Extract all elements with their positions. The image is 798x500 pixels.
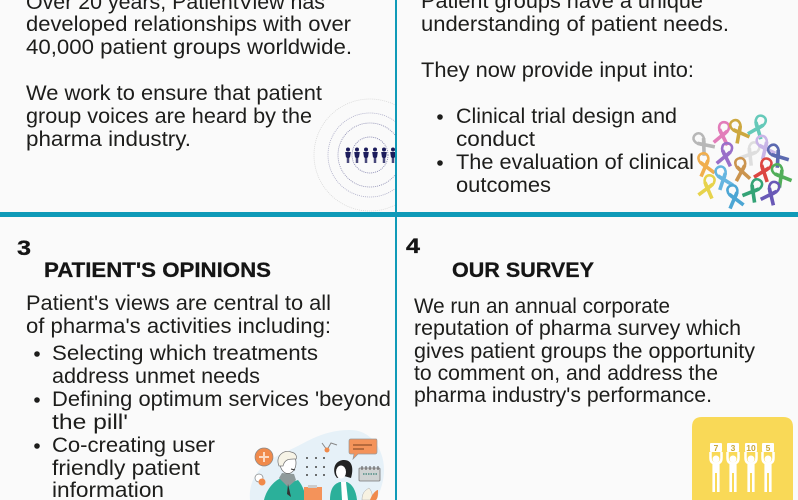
panel 1 body text: developed relationships with over <box>26 12 351 36</box>
panel 4 body text <box>414 294 755 407</box>
panel 3 bullet list: friendly patient <box>52 456 200 480</box>
panel 2 bullet list <box>437 104 694 197</box>
panel 4 body text: reputation of pharma survey which <box>414 316 741 340</box>
panel 4: our survey <box>406 234 793 500</box>
icon: yellow tile with people holding score cards: 5 <box>766 443 771 453</box>
panel 1 body text: We work to ensure that patient <box>26 81 322 105</box>
panel 3 bullet list: Co-creating user <box>52 433 215 457</box>
panel 4 body text: to comment on, and address the <box>414 361 718 385</box>
number 3: 3 <box>17 236 31 260</box>
panel 1: relationships <box>26 0 426 211</box>
panel 2 bullet list: The evaluation of clinical <box>456 150 694 174</box>
panel 3 bullet list <box>34 341 391 500</box>
illustration: doctor and patient <box>250 430 384 500</box>
panel 2 bullet list: outcomes <box>456 173 551 197</box>
panel 4 body text: gives patient groups the opportunity <box>414 339 755 363</box>
panel 3 bullet list: Selecting which treatments <box>52 341 318 365</box>
icon: yellow tile with people holding score cards: 3 <box>731 443 736 453</box>
icon: awareness ribbons <box>690 113 792 209</box>
panel 3 bullet list: Defining optimum services 'beyond <box>52 387 391 411</box>
panel 2 bullet list: conduct <box>456 127 535 151</box>
panel 2 body text <box>421 0 729 82</box>
panel 3 bullet list: address unmet needs <box>52 364 260 388</box>
icon: yellow tile with people holding score cards: 7 <box>714 443 719 453</box>
panel 2 bullet list: Clinical trial design and <box>456 104 677 128</box>
panel 3 bullet list: the pill' <box>52 410 128 434</box>
panel 3 intro text: Patient's views are central to all <box>26 291 331 315</box>
panel 4 body text: We run an annual corporate <box>414 294 670 318</box>
panel 2: patient group input <box>421 0 792 209</box>
heading: our survey: OUR SURVEY <box>452 258 594 282</box>
panel 1 body text <box>26 0 352 151</box>
icon: yellow tile with people holding score cards: 10 <box>746 443 756 453</box>
icon: yellow tile with people holding score cards <box>692 417 793 500</box>
panel 1 body text: group voices are heard by the <box>26 104 312 128</box>
panel 4 body text: pharma industry's performance. <box>414 383 712 407</box>
panel 3 intro text <box>26 291 331 338</box>
panel 3 intro text: of pharma's activities including: <box>26 314 331 338</box>
panel 3: patient's opinions <box>17 236 391 500</box>
heading: patient's opinions: PATIENT'S OPINIONS <box>44 258 271 282</box>
panel 2 body text: understanding of patient needs. <box>421 12 729 36</box>
panel 2 body text: They now provide input into: <box>421 58 694 82</box>
panel 1 body text: pharma industry. <box>26 127 191 151</box>
panel 1 body text: 40,000 patient groups worldwide. <box>26 35 352 59</box>
number 4: 4 <box>406 234 420 258</box>
icon: concentric rings around people <box>314 98 395 212</box>
